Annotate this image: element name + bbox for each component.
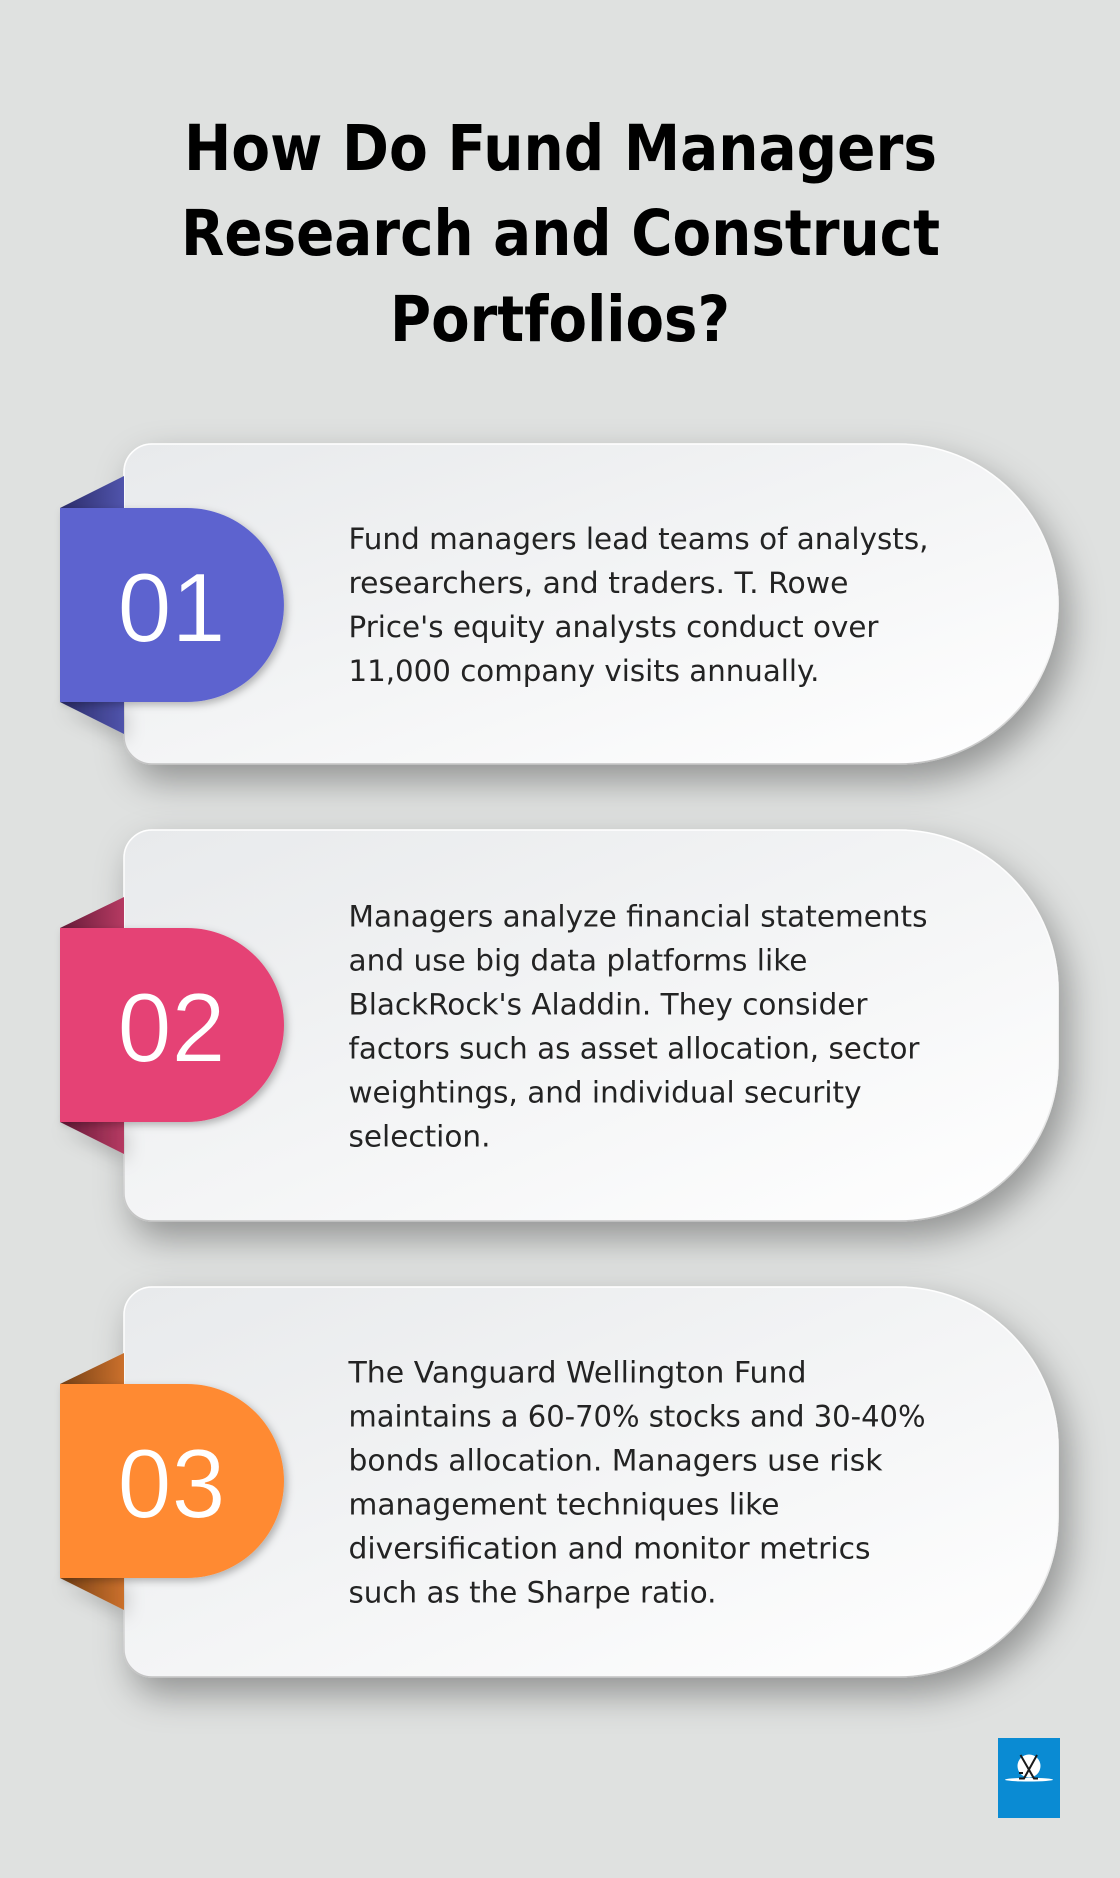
icon: hockey sticks logo <box>998 1738 1060 1818</box>
text: step 02 <box>348 900 928 1154</box>
number badge 02 <box>60 928 284 1122</box>
title: Portfolios? <box>390 283 730 356</box>
panel: step 02 <box>60 830 1058 1221</box>
title: Research and Construct <box>181 197 940 270</box>
text: step 02: selection. <box>348 1120 490 1154</box>
panel: step 03 <box>60 1287 1058 1677</box>
card background 02 <box>124 830 1058 1221</box>
ribbon fold top 01 <box>60 476 124 508</box>
text: step 02: factors such as asset allocation, sector <box>348 1032 920 1066</box>
text: step 03 <box>347 1356 925 1610</box>
text: step 02: Managers analyze financial statements <box>348 900 928 934</box>
number badge 03 <box>60 1384 284 1578</box>
text: step 03: diversification and monitor metrics <box>348 1532 870 1566</box>
ribbon fold bottom 03 <box>60 1578 124 1610</box>
text: step 03: bonds allocation. Managers use risk <box>348 1444 882 1478</box>
card background 03 <box>124 1287 1058 1677</box>
text: step 02: weightings, and individual security <box>348 1076 862 1110</box>
text: step 01: researchers, and traders. T. Rowe <box>348 566 848 600</box>
number 03: 03 <box>118 1428 226 1538</box>
text: step 03: The Vanguard Wellington Fund <box>347 1356 806 1390</box>
text: step 01: Fund managers lead teams of analysts, <box>348 522 928 556</box>
number 01: 01 <box>118 552 226 662</box>
number badge 01 <box>60 508 284 702</box>
card background 01 <box>124 444 1058 764</box>
ribbon fold top 03 <box>60 1353 124 1384</box>
text: step 01: Price's equity analysts conduct over <box>348 610 879 644</box>
panel: step 01 <box>60 444 1058 764</box>
ribbon fold bottom 01 <box>60 702 124 734</box>
text: step 03: such as the Sharpe ratio. <box>348 1576 716 1610</box>
text: step 02: and use big data platforms like <box>348 944 808 978</box>
text: step 03: maintains a 60-70% stocks and 30-40% <box>348 1400 926 1434</box>
text: step 01: 11,000 company visits annually. <box>348 654 820 688</box>
text: step 02: BlackRock's Aladdin. They consider <box>348 988 868 1022</box>
ribbon fold top 02 <box>60 897 124 928</box>
number 02: 02 <box>118 972 226 1082</box>
text: step 01 <box>348 522 928 688</box>
text: step 03: management techniques like <box>348 1488 780 1522</box>
title: How Do Fund Managers <box>184 112 937 185</box>
title <box>181 112 940 356</box>
ribbon fold bottom 02 <box>60 1122 124 1154</box>
